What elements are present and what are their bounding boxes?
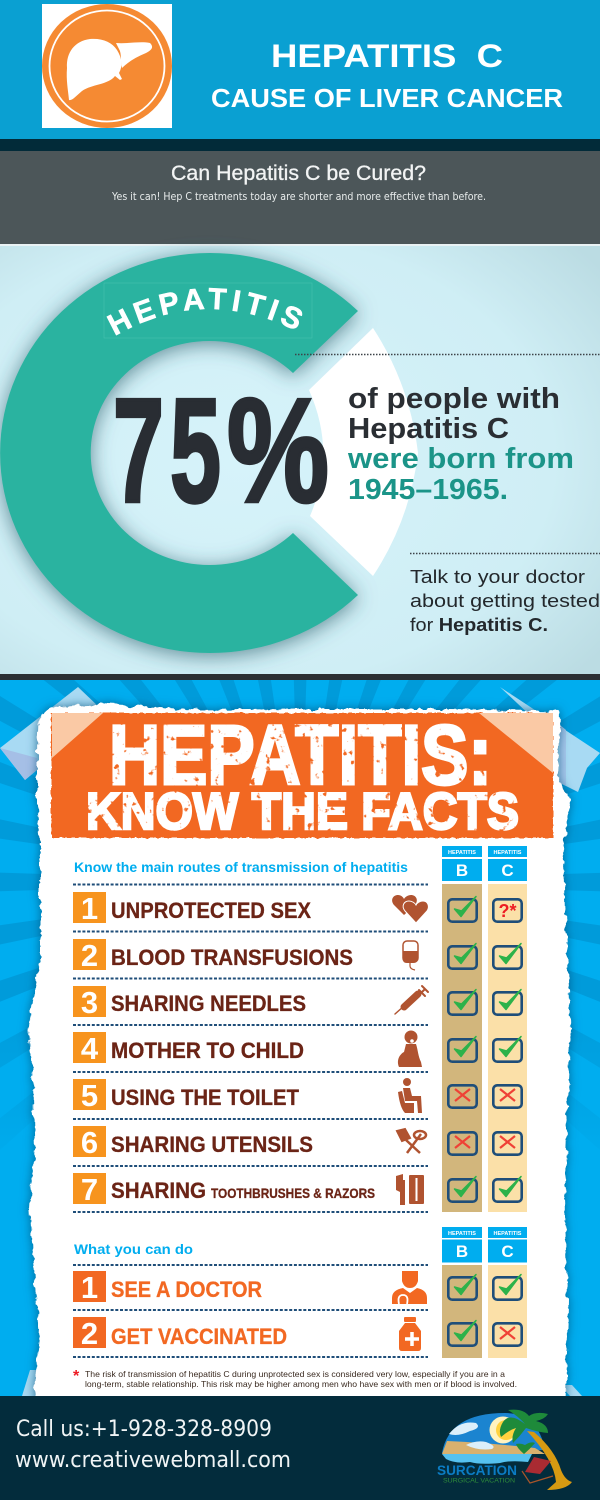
text: talk to doctor: for Hepatitis C. bbox=[410, 614, 548, 635]
column headers: transmission bbox=[442, 846, 527, 881]
list: transmission routes: 2 bbox=[81, 938, 98, 973]
text: talk to doctor: Talk to your doctor bbox=[410, 566, 585, 587]
logo: surcation: SURGICAL VACATION bbox=[443, 1478, 515, 1484]
list: transmission routes: 3 bbox=[81, 985, 98, 1020]
text: talk to doctor: about getting tested bbox=[410, 590, 600, 611]
heading: Can Hepatitis C be Cured? bbox=[171, 162, 426, 185]
white ring wedge bbox=[309, 328, 418, 576]
column headers: prevention: C bbox=[501, 1242, 514, 1261]
list: transmission routes bbox=[73, 891, 375, 1207]
list: transmission routes: SHARING UTENSILS bbox=[111, 1132, 313, 1157]
list: prevention: GET VACCINATED bbox=[111, 1324, 287, 1349]
contact details: Call us:+1-928-328-8909 bbox=[16, 1417, 272, 1442]
list: transmission routes: BLOOD TRANSFUSIONS bbox=[111, 945, 353, 970]
torn paper bbox=[28, 704, 571, 1402]
icon: blood bag bbox=[402, 941, 418, 970]
logo: surcation bbox=[437, 1410, 572, 1490]
text block: Yes it can! Hep C treatments today are shorter and more effective than before. bbox=[111, 191, 486, 203]
text: born from: Hepatitis C bbox=[348, 413, 509, 445]
title bbox=[211, 38, 563, 113]
big number: % bbox=[227, 368, 329, 534]
icon: toothbrush and razor bbox=[396, 1174, 424, 1205]
list: prevention: SEE A DOCTOR bbox=[111, 1277, 262, 1302]
list: transmission routes: 1 bbox=[81, 891, 98, 926]
footer bbox=[0, 1396, 600, 1500]
list: transmission routes: SHARING NEEDLES bbox=[111, 991, 306, 1016]
prevention columns bbox=[442, 1265, 527, 1358]
curved label: HEPATITIS bbox=[106, 288, 302, 336]
icon: utensils bbox=[397, 1129, 426, 1153]
column headers: prevention: HEPATITIS bbox=[448, 1231, 476, 1237]
footnote: The risk of transmission of hepatitis C during unprotected sex is considered very low, especially if you are in a bbox=[85, 1369, 505, 1379]
list: transmission routes: SHARING bbox=[111, 1178, 206, 1203]
heading: what you can do: What you can do bbox=[74, 1241, 193, 1257]
heading: banner title: HEPATITIS: bbox=[109, 708, 492, 802]
icon: medicine bottle bbox=[399, 1317, 421, 1351]
big number bbox=[113, 368, 329, 534]
icon: syringe bbox=[395, 986, 428, 1014]
column headers: prevention: HEPATITIS bbox=[494, 1231, 522, 1237]
column headers: prevention bbox=[442, 1227, 527, 1262]
heading: banner title bbox=[86, 708, 519, 841]
chart: teal C ring bbox=[0, 253, 358, 653]
icon: doctor bbox=[392, 1271, 427, 1304]
list: prevention: 2 bbox=[81, 1316, 98, 1351]
list: transmission routes: UNPROTECTED SEX bbox=[111, 898, 311, 923]
icon: person on toilet bbox=[398, 1078, 422, 1113]
panel: can hepatitis C be cured bbox=[0, 151, 600, 244]
transmission columns bbox=[442, 884, 527, 1212]
column headers: transmission: HEPATITIS bbox=[448, 850, 476, 856]
list: transmission routes: TOOTHBRUSHES & RAZORS bbox=[211, 1185, 375, 1201]
big number: 7 bbox=[113, 368, 164, 534]
title: CAUSE OF LIVER CANCER bbox=[211, 85, 563, 113]
list: transmission routes: 6 bbox=[81, 1125, 98, 1160]
text: born from: 1945–1965. bbox=[348, 474, 508, 506]
list: transmission routes: 5 bbox=[81, 1078, 98, 1113]
text: talk to doctor bbox=[410, 566, 600, 635]
column headers: transmission: HEPATITIS bbox=[494, 850, 522, 856]
text: born from bbox=[347, 383, 574, 506]
title: HEPATITIS C bbox=[271, 38, 503, 74]
list: prevention bbox=[73, 1270, 287, 1351]
panel: know the facts bbox=[0, 680, 600, 1396]
icon: hearts bbox=[392, 895, 428, 923]
header band bbox=[0, 0, 600, 151]
text: born from: of people with bbox=[348, 383, 560, 415]
heading: banner title: KNOW THE FACTS bbox=[86, 783, 519, 841]
footnote bbox=[73, 1368, 517, 1389]
list: transmission routes: 7 bbox=[81, 1172, 98, 1207]
text: born from: were born from bbox=[347, 443, 574, 475]
list: transmission routes: 4 bbox=[81, 1031, 99, 1066]
column headers: transmission: C bbox=[501, 861, 514, 880]
icon: pregnant woman bbox=[398, 1030, 422, 1067]
panel: 75 percent statistic bbox=[0, 244, 600, 674]
transmission columns: ?* bbox=[498, 901, 516, 921]
logo: surcation: SURCATION bbox=[437, 1463, 517, 1478]
list: prevention: 1 bbox=[81, 1270, 98, 1305]
contact details: www.creativewebmall.com bbox=[15, 1448, 291, 1473]
list: transmission routes: MOTHER TO CHILD bbox=[111, 1038, 304, 1063]
column headers: transmission: B bbox=[456, 861, 468, 880]
contact details bbox=[15, 1417, 291, 1473]
icon: liver logo bbox=[42, 4, 172, 128]
tape corners bbox=[0, 687, 600, 1396]
footnote: * bbox=[73, 1368, 80, 1385]
banner bbox=[51, 708, 553, 841]
heading: routes of transmission: Know the main routes of transmission of hepatitis bbox=[74, 860, 408, 875]
list: transmission routes: USING THE TOILET bbox=[111, 1085, 300, 1110]
footnote: long-term, stable relationship. This risk may be higher among men who have sex with men or if blood is involved. bbox=[85, 1379, 517, 1389]
big number: 5 bbox=[170, 368, 221, 534]
column headers: prevention: B bbox=[456, 1242, 468, 1261]
